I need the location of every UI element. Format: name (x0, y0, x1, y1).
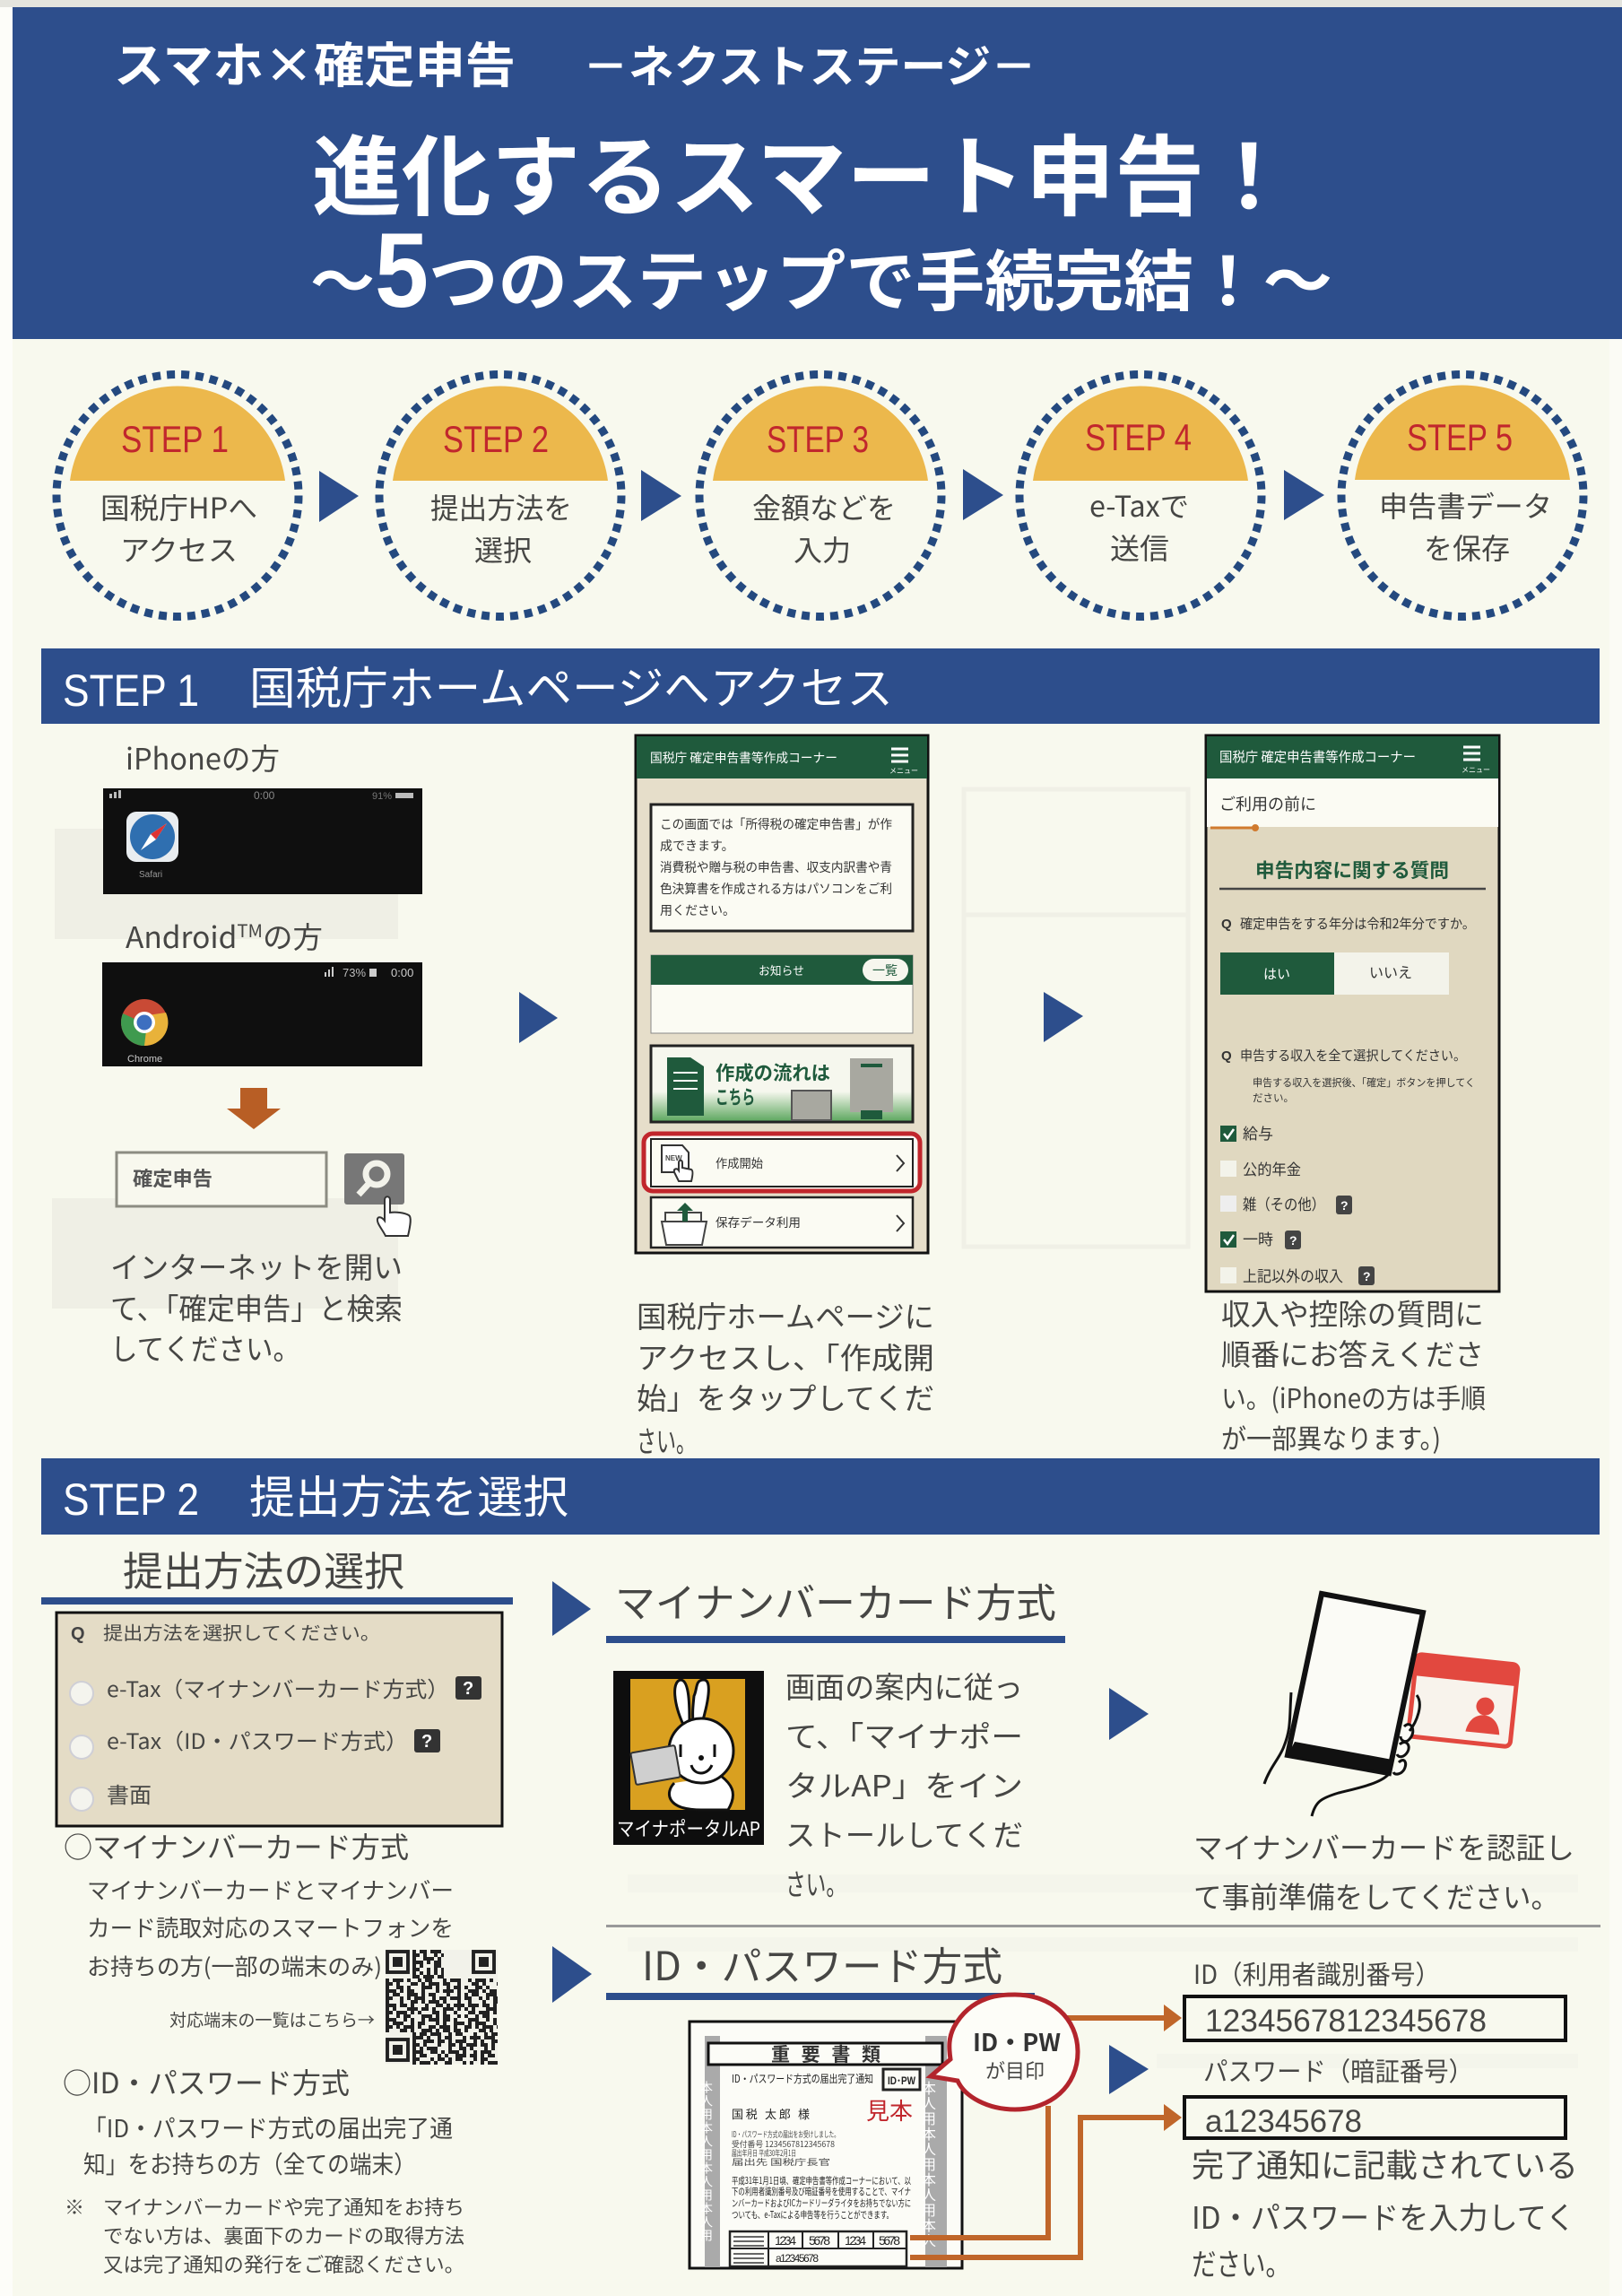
search box: 確定申告 (133, 1163, 213, 1192)
icon: Mynaportal AP app (613, 1671, 764, 1845)
notice box: この画面では「所得税の確定申告書」が作 (660, 815, 892, 833)
sub heading: choose method: 提出方法の選択 (123, 1539, 404, 1597)
arrow (1284, 470, 1324, 520)
question: year: 確定申告をする年分は令和2年分ですか。 (1240, 914, 1475, 933)
sample document: 届出年月日 平成30年2月1日 (732, 2147, 796, 2159)
news panel (651, 955, 913, 1033)
caption: answer questions: 収入や控除の質問に (1221, 1292, 1484, 1334)
checklist: 上記以外の収入 (1243, 1264, 1343, 1286)
text block: my number card method: ○マイナンバーカード方式 (64, 1825, 409, 1866)
section heading: step 1: STEP 1 (63, 665, 199, 716)
icon: search button with hand (344, 1153, 411, 1236)
text block: ID/password method: 知」をお持ちの方（全ての端末） (83, 2145, 416, 2180)
question: year: いいえ (1369, 961, 1412, 982)
arrow (552, 1946, 592, 2003)
caption: authenticate card: て事前準備をしてください。 (1193, 1874, 1559, 1917)
body text (110, 1244, 403, 1369)
text block: my number card method: お持ちの方(一部の端末のみ) (87, 1949, 382, 1982)
icon: help (414, 1729, 440, 1752)
arrow (641, 470, 681, 521)
iPhone screen: 0:00 (254, 789, 275, 802)
question: year (1220, 914, 1475, 995)
iPhone screen: 91% (372, 791, 392, 802)
text: install app: 画面の案内に従っ (785, 1664, 1023, 1707)
section heading: step 2 (41, 1458, 1600, 1535)
notice box (651, 804, 913, 931)
step 1 circle: STEP 1 (121, 418, 229, 460)
password field: a12345678 (1205, 2104, 1362, 2139)
highlighted button: start (644, 1134, 920, 1191)
callout: ID PW mark: ID・PW (973, 2023, 1061, 2058)
main title: 進化するスマート申告！ (312, 107, 1294, 234)
sample document: 1234 (845, 2233, 866, 2248)
arrow (1109, 2045, 1149, 2094)
arrow: orange down (227, 1088, 281, 1129)
icon: help (455, 1676, 481, 1700)
step 4 circle: STEP 4 (1085, 416, 1192, 458)
panel: method selection: Q (71, 1624, 85, 1644)
body text: インターネットを開い (110, 1244, 403, 1287)
step 3 circle: STEP 3 (767, 418, 869, 460)
Android label: TM (237, 917, 263, 943)
sub heading: choose method (41, 1539, 513, 1605)
sample document: 見本 (866, 2093, 913, 2126)
iPhone label: iPhoneの方 (126, 735, 280, 778)
checklist: 一時 (1243, 1227, 1273, 1249)
text block: ID/password method: 「ID・パスワード方式の届出完了通 (83, 2109, 453, 2144)
header subtitle tagline: －ネクストステージ－ (583, 31, 1037, 96)
heading: ID password method: ID・パスワード方式 (642, 1935, 1002, 1992)
checklist: ? (1363, 1269, 1371, 1283)
sample document: 平成31年1月1日頃、確定申告書等作成コーナーにおいて、以 (732, 2174, 911, 2187)
sample document: 1234 (775, 2233, 796, 2248)
text: install app: て、「マイナポー (785, 1713, 1023, 1756)
connector lines (910, 2018, 1166, 2257)
QR code (386, 1950, 498, 2064)
step 4 circle (1019, 375, 1262, 617)
panel: method selection: 書面 (107, 1778, 152, 1809)
footnote (65, 2192, 464, 2278)
section heading: step 1 (41, 648, 1600, 724)
main title line 2: 5 (375, 212, 429, 330)
step 4 circle: 送信 (1110, 526, 1169, 568)
highlighted button: start: 作成開始 (716, 1153, 763, 1171)
sample document: ID･PW (888, 2074, 916, 2087)
step 2 circle: 提出方法を (430, 486, 572, 527)
checklist (1220, 1121, 1375, 1286)
checklist: ? (1340, 1198, 1349, 1213)
arrowheads (1164, 2005, 1182, 2131)
ID field: ID（利用者識別番号） (1193, 1954, 1440, 1992)
phone screen: e-Tax top page (636, 735, 928, 1253)
caption: access site: アクセスし、「作成開 (637, 1335, 934, 1378)
panel: method selection: e-Tax（ID・パスワード方式） (107, 1724, 408, 1755)
phone screen: questions (1206, 735, 1499, 1292)
text block: my number card method: マイナンバーカードとマイナンバー (87, 1873, 454, 1906)
arrow (963, 469, 1003, 520)
icon: help: ? (421, 1732, 432, 1752)
checklist: 公的年金 (1243, 1157, 1301, 1179)
arrow (552, 1581, 591, 1636)
news panel: 一覧 (872, 961, 898, 979)
step 5 circle (1341, 375, 1583, 617)
notice box: 色決算書を作成される方はパソコンをご利 (660, 880, 892, 898)
sample document: 国税 太郎 様 (732, 2105, 810, 2122)
text: install app: タルAP」をイン (785, 1762, 1023, 1805)
callout: ID PW mark: が目印 (985, 2056, 1045, 2084)
Android screen (102, 962, 422, 1066)
main title line 2: ～ (310, 230, 375, 324)
text: install app: さい。 (785, 1861, 846, 1904)
sample document: 本人用本人用本人用本人用 (698, 2081, 716, 2242)
question: year: Q (1221, 917, 1232, 932)
caption: access site: 国税庁ホームページに (637, 1293, 934, 1336)
step 3 circle: 入力 (794, 528, 851, 570)
arrow (1044, 992, 1083, 1042)
heading: my number card method: マイナンバーカード方式 (615, 1570, 1056, 1629)
step 1 circle: 国税庁HPへ (100, 486, 257, 527)
footnote: でない方は、裏面下のカードの取得方法 (103, 2221, 464, 2249)
icon: Mynaportal AP app: マイナポータルAP (617, 1813, 760, 1842)
search box (117, 1152, 326, 1206)
sample document: ンバーカードおよびICカードリーダライタをお持ちでない方に (732, 2196, 911, 2210)
checklist: 雑（その他） (1243, 1192, 1325, 1214)
body text: してください。 (110, 1326, 300, 1369)
Android screen: 73% (343, 966, 366, 979)
step 3 circle: 金額などを (752, 486, 896, 527)
main title line 2 (310, 212, 1332, 330)
text block: my number card method: カード読取対応のスマートフォンを (87, 1910, 454, 1944)
caption: enter credentials: 完了通知に記載されている (1192, 2140, 1578, 2187)
main title line 2: つのステップで手続完結！～ (429, 229, 1332, 325)
phone screen: questions: 国税庁 確定申告書等作成コーナー (1219, 747, 1416, 766)
footnote: ※ (65, 2192, 84, 2221)
notice box: 用ください。 (660, 901, 735, 919)
caption: answer questions (1221, 1292, 1486, 1457)
checklist: ? (1289, 1233, 1297, 1248)
password field (1184, 2051, 1566, 2139)
caption: enter credentials: ださい。 (1192, 2240, 1290, 2284)
Android label: の方 (263, 914, 323, 957)
sample document: 重要書類 (771, 2040, 880, 2067)
step 5 circle: STEP 5 (1407, 416, 1513, 458)
caption: enter credentials: ID・パスワードを入力してく (1192, 2194, 1575, 2238)
ID field (1184, 1954, 1566, 2040)
section heading: step 1: 国税庁ホームページへアクセス (249, 653, 893, 718)
header banner (13, 7, 1622, 339)
icon: hand with phone and card (1264, 1594, 1518, 1816)
text block: my number card method: 対応端末の一覧はこちら→ (169, 2007, 375, 2031)
section heading: step 2: 提出方法を選択 (249, 1462, 568, 1526)
step 4 circle: e-Taxで (1089, 484, 1189, 526)
sample document: 5678 (879, 2233, 900, 2248)
caption: authenticate card: マイナンバーカードを認証し (1193, 1825, 1574, 1867)
question: income: ださい。 (1253, 1091, 1294, 1105)
caption: access site: 始」をタップしてくだ (637, 1375, 934, 1418)
password field: パスワード（暗証番号） (1203, 2051, 1473, 2089)
footnote: マイナンバーカードや完了通知をお持ち (103, 2192, 464, 2221)
panel: method selection: e-Tax（マイナンバーカード方式） (107, 1672, 449, 1703)
sample document: ついても、e-Taxによる申告等を行うことができます。 (732, 2208, 893, 2222)
caption: access site (637, 1293, 934, 1461)
arrow (519, 992, 558, 1043)
sample document: 下の利用者識別番号及び暗証番号を使用することで、マイナ (732, 2185, 911, 2198)
caption: answer questions: 順番にお答えくださ (1221, 1332, 1484, 1374)
footnote: 又は完了通知の発行をご確認ください。 (103, 2249, 464, 2278)
icon: help: ? (463, 1679, 473, 1699)
text: install app: ストールしてくだ (785, 1812, 1023, 1855)
caption: access site: さい。 (637, 1418, 696, 1461)
notice box: 消費税や贈与税の申告書、収支内訳書や青 (660, 858, 892, 876)
question: year: はい (1263, 964, 1290, 983)
caption: enter credentials (1192, 2140, 1578, 2284)
banner: flow (651, 1046, 913, 1122)
question heading: 申告内容に関する質問 (1255, 856, 1449, 883)
button: saved data (651, 1197, 913, 1248)
highlighted button: start: NEW (665, 1154, 682, 1162)
arrow (319, 471, 359, 522)
phone screen: e-Tax top page: メニュー (889, 766, 918, 776)
sample document (690, 2022, 962, 2268)
caption: answer questions: い。(iPhoneの方は手順 (1221, 1377, 1486, 1416)
arrow (1109, 1688, 1149, 1740)
step 1 circle: アクセス (120, 528, 238, 570)
icon: Safari (126, 812, 178, 880)
question: income: 申告する収入を全て選択してください。 (1240, 1046, 1466, 1065)
Android label: Android (126, 914, 236, 957)
phone screen: e-Tax top page: 国税庁 確定申告書等作成コーナー (650, 749, 837, 767)
question: income (1221, 1046, 1475, 1105)
button: saved data: 保存データ利用 (716, 1213, 801, 1231)
sample document: a12345678 (776, 2252, 819, 2265)
step 3 circle (699, 375, 941, 617)
step 1 left column: open browser (102, 735, 422, 1369)
sample document: 本人用本人用本人用本人 (918, 2081, 940, 2248)
step 2 circle: 選択 (474, 528, 532, 570)
question: income: Q (1221, 1048, 1232, 1064)
banner: flow: こちら (716, 1083, 755, 1110)
banner: flow: 作成の流れは (716, 1058, 830, 1086)
section heading: step 2: STEP 2 (63, 1474, 199, 1525)
caption: answer questions: が一部異なります。) (1221, 1417, 1441, 1457)
caption: authenticate card (1193, 1825, 1574, 1917)
text block: ID/password method (63, 2061, 453, 2180)
step 5 circle: を保存 (1424, 526, 1510, 568)
panel: method selection (56, 1613, 502, 1826)
callout: ID PW mark (931, 1995, 1078, 2109)
icon: Safari: Safari (139, 870, 162, 880)
sample document: 届出先 国税庁長官 (732, 2156, 830, 2168)
step 5 circle: 申告書データ (1379, 484, 1552, 526)
sample document: 5678 (809, 2233, 830, 2248)
icon: Chrome (121, 999, 168, 1065)
body text: て、「確定申告」と検索 (110, 1285, 403, 1328)
iPhone screen (103, 788, 422, 894)
text: install app (785, 1664, 1023, 1904)
sample document: ID・パスワード方式の届出完了通知 (732, 2071, 873, 2086)
step flow: five circles (56, 375, 1583, 617)
question: income: 申告する収入を選択後、「確定」ボタンを押してく (1253, 1075, 1475, 1090)
Android screen: 0:00 (391, 966, 413, 979)
panel: method selection: 提出方法を選択してください。 (103, 1618, 380, 1645)
phone screen: questions: メニュー (1462, 765, 1490, 775)
news panel: お知らせ (759, 961, 804, 978)
text block: my number card method (64, 1825, 454, 2031)
checklist: 給与 (1243, 1121, 1273, 1144)
phone screen: questions: ご利用の前に (1219, 792, 1316, 815)
sample document: ID・パスワード方式の届出をお受けしました。 (732, 2128, 839, 2140)
step 1 circle (56, 375, 299, 617)
ID field: 1234567812345678 (1205, 2004, 1487, 2039)
sample document: 受付番号 1234567812345678 (732, 2138, 835, 2150)
step 2 circle (379, 375, 621, 617)
header subtitle: スマホ×確定申告 (114, 26, 516, 97)
step 2 circle: STEP 2 (443, 418, 549, 460)
text block: ID/password method: ○ID・パスワード方式 (63, 2061, 350, 2102)
icon: Chrome: Chrome (127, 1054, 162, 1065)
notice box: 成できます。 (660, 837, 734, 855)
